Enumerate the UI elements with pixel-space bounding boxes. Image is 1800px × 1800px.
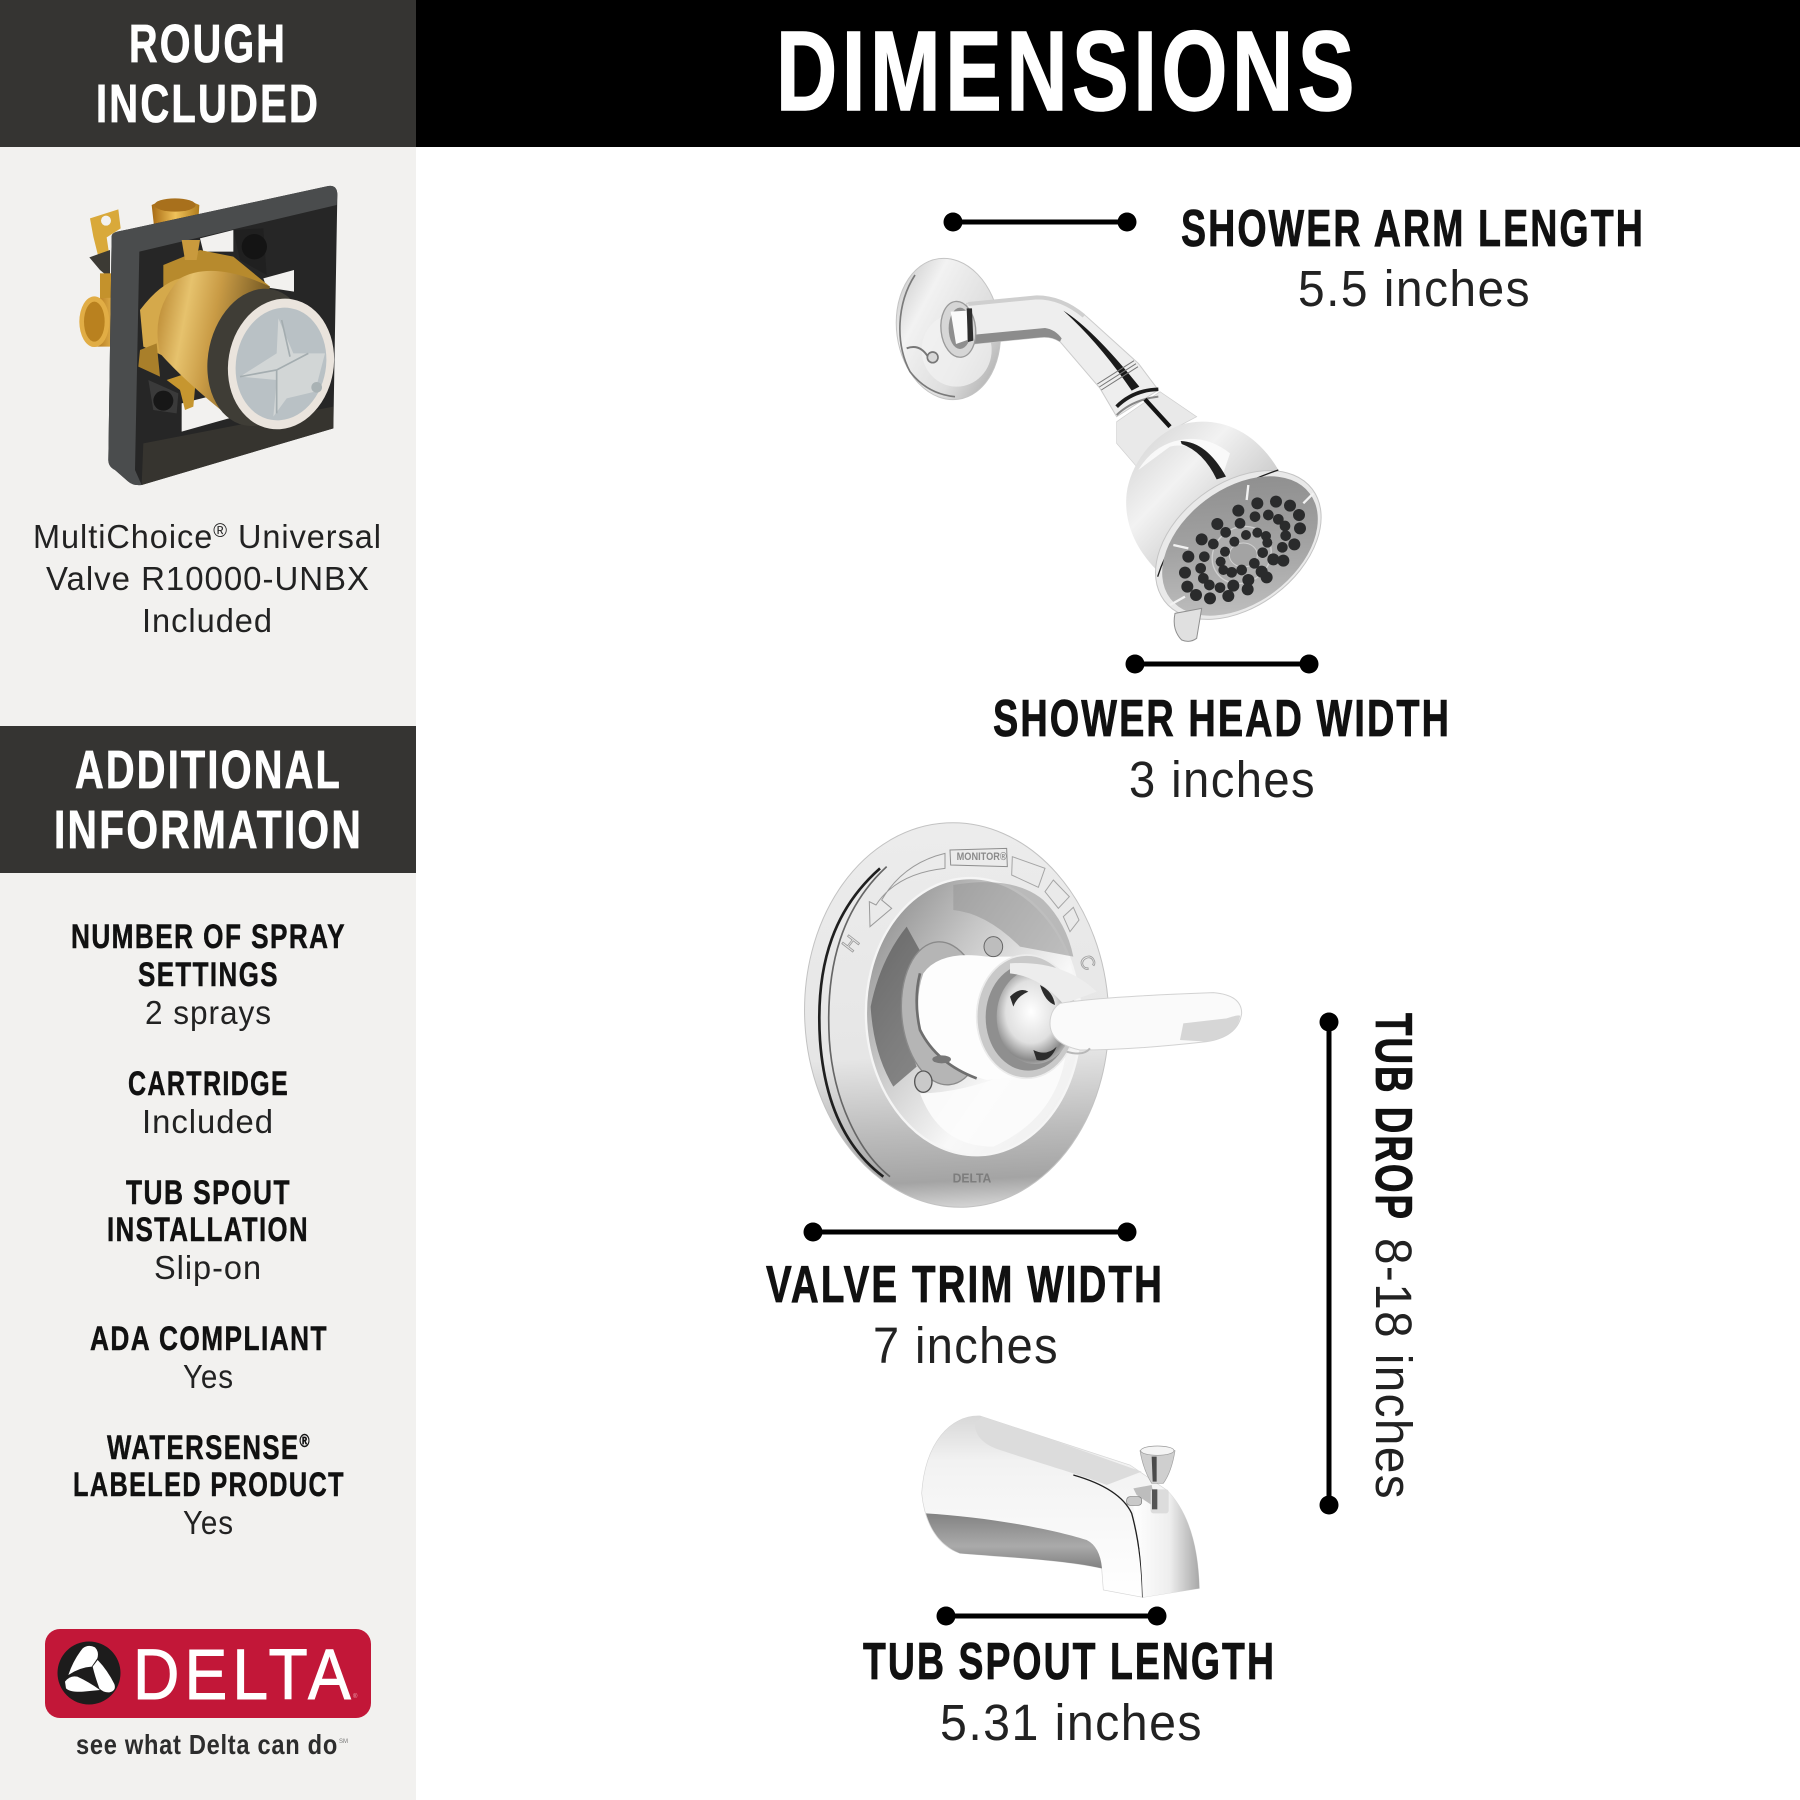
measure: tub drop: 8-18 inches bbox=[1365, 1238, 1422, 1500]
measure: shower head width: SHOWER HEAD WIDTH bbox=[993, 690, 1451, 748]
spec: cartridge: CARTRIDGE bbox=[128, 1065, 289, 1103]
image: valve trim: MONITOR® bbox=[957, 851, 1007, 863]
logo: delta: see what Delta can do bbox=[76, 1729, 338, 1760]
text: valve caption: Universal bbox=[228, 518, 382, 555]
image: tub spout bbox=[922, 1416, 1199, 1597]
logo: delta: DELTA bbox=[133, 1636, 356, 1715]
heading: additional information bbox=[0, 726, 416, 873]
image: valve trim bbox=[795, 815, 1242, 1215]
panel: left sidebar bbox=[0, 0, 416, 1800]
text: valve caption: Included bbox=[142, 602, 273, 639]
dimension line: shower head bbox=[1126, 654, 1318, 674]
spec: cartridge bbox=[128, 1065, 289, 1140]
text: valve caption bbox=[33, 518, 382, 639]
image: rough-in valve bbox=[79, 186, 344, 485]
spec: spray settings: NUMBER OF SPRAY bbox=[71, 918, 346, 956]
spec: watersense bbox=[73, 1429, 345, 1541]
heading: additional information: INFORMATION bbox=[54, 800, 363, 860]
image: valve trim: C bbox=[1074, 952, 1099, 975]
measure: shower arm length bbox=[944, 200, 1645, 317]
logo: delta: SM bbox=[339, 1739, 348, 1745]
spec: ada compliant: Yes bbox=[183, 1358, 234, 1395]
measure: tub drop: TUB DROP bbox=[1364, 1013, 1422, 1221]
text: valve caption: ® bbox=[213, 521, 228, 542]
logo: delta: ® bbox=[353, 1693, 358, 1700]
measure: valve trim width bbox=[766, 1222, 1164, 1374]
heading: rough included: ROUGH bbox=[129, 14, 287, 74]
image: valve trim: H bbox=[838, 931, 864, 956]
measure: tub spout length: TUB SPOUT LENGTH bbox=[863, 1633, 1276, 1691]
spec: watersense: ® bbox=[300, 1431, 311, 1451]
image: shower head and arm bbox=[887, 252, 1349, 650]
heading: dimensions bbox=[416, 0, 1800, 147]
dimension line: tub drop bbox=[1320, 1012, 1338, 1514]
text: valve caption: Valve R10000-UNBX bbox=[46, 560, 370, 597]
spec: spray settings: 2 sprays bbox=[145, 994, 272, 1031]
text: valve caption: MultiChoice bbox=[33, 518, 216, 555]
heading: dimensions: DIMENSIONS bbox=[776, 8, 1359, 134]
measure: tub spout length bbox=[863, 1606, 1276, 1751]
spec: ada compliant bbox=[90, 1320, 328, 1395]
spec: watersense: WATERSENSE bbox=[107, 1429, 361, 1467]
spec: watersense: LABELED PRODUCT bbox=[73, 1466, 345, 1504]
heading: additional information: ADDITIONAL bbox=[75, 740, 342, 800]
spec: spray settings: SETTINGS bbox=[138, 956, 279, 994]
spec: watersense: Yes bbox=[183, 1504, 234, 1541]
dimension line: shower arm bbox=[944, 212, 1136, 232]
measure: tub spout length: 5.31 inches bbox=[940, 1694, 1203, 1751]
heading: rough included bbox=[0, 0, 416, 147]
measure: shower arm length: 5.5 inches bbox=[1298, 260, 1531, 317]
spec: spray settings bbox=[71, 918, 346, 1031]
dimension line: valve trim bbox=[804, 1222, 1136, 1242]
logo: delta bbox=[45, 1629, 371, 1760]
heading: rough included: INCLUDED bbox=[96, 74, 320, 134]
spec: tub spout installation: Slip-on bbox=[154, 1249, 262, 1286]
spec: tub spout installation bbox=[107, 1174, 309, 1286]
spec: ada compliant: ADA COMPLIANT bbox=[90, 1320, 328, 1358]
measure: shower head width bbox=[993, 654, 1451, 808]
spec: cartridge: Included bbox=[142, 1103, 274, 1140]
measure: tub drop bbox=[1320, 1012, 1422, 1514]
spec: tub spout installation: TUB SPOUT bbox=[126, 1174, 291, 1212]
measure: valve trim width: 7 inches bbox=[873, 1317, 1059, 1374]
measure: shower head width: 3 inches bbox=[1129, 751, 1316, 808]
dimension line: tub spout bbox=[936, 1606, 1166, 1626]
measure: valve trim width: VALVE TRIM WIDTH bbox=[766, 1256, 1164, 1314]
image: valve trim: DELTA bbox=[953, 1170, 992, 1185]
spec: tub spout installation: INSTALLATION bbox=[107, 1211, 309, 1249]
